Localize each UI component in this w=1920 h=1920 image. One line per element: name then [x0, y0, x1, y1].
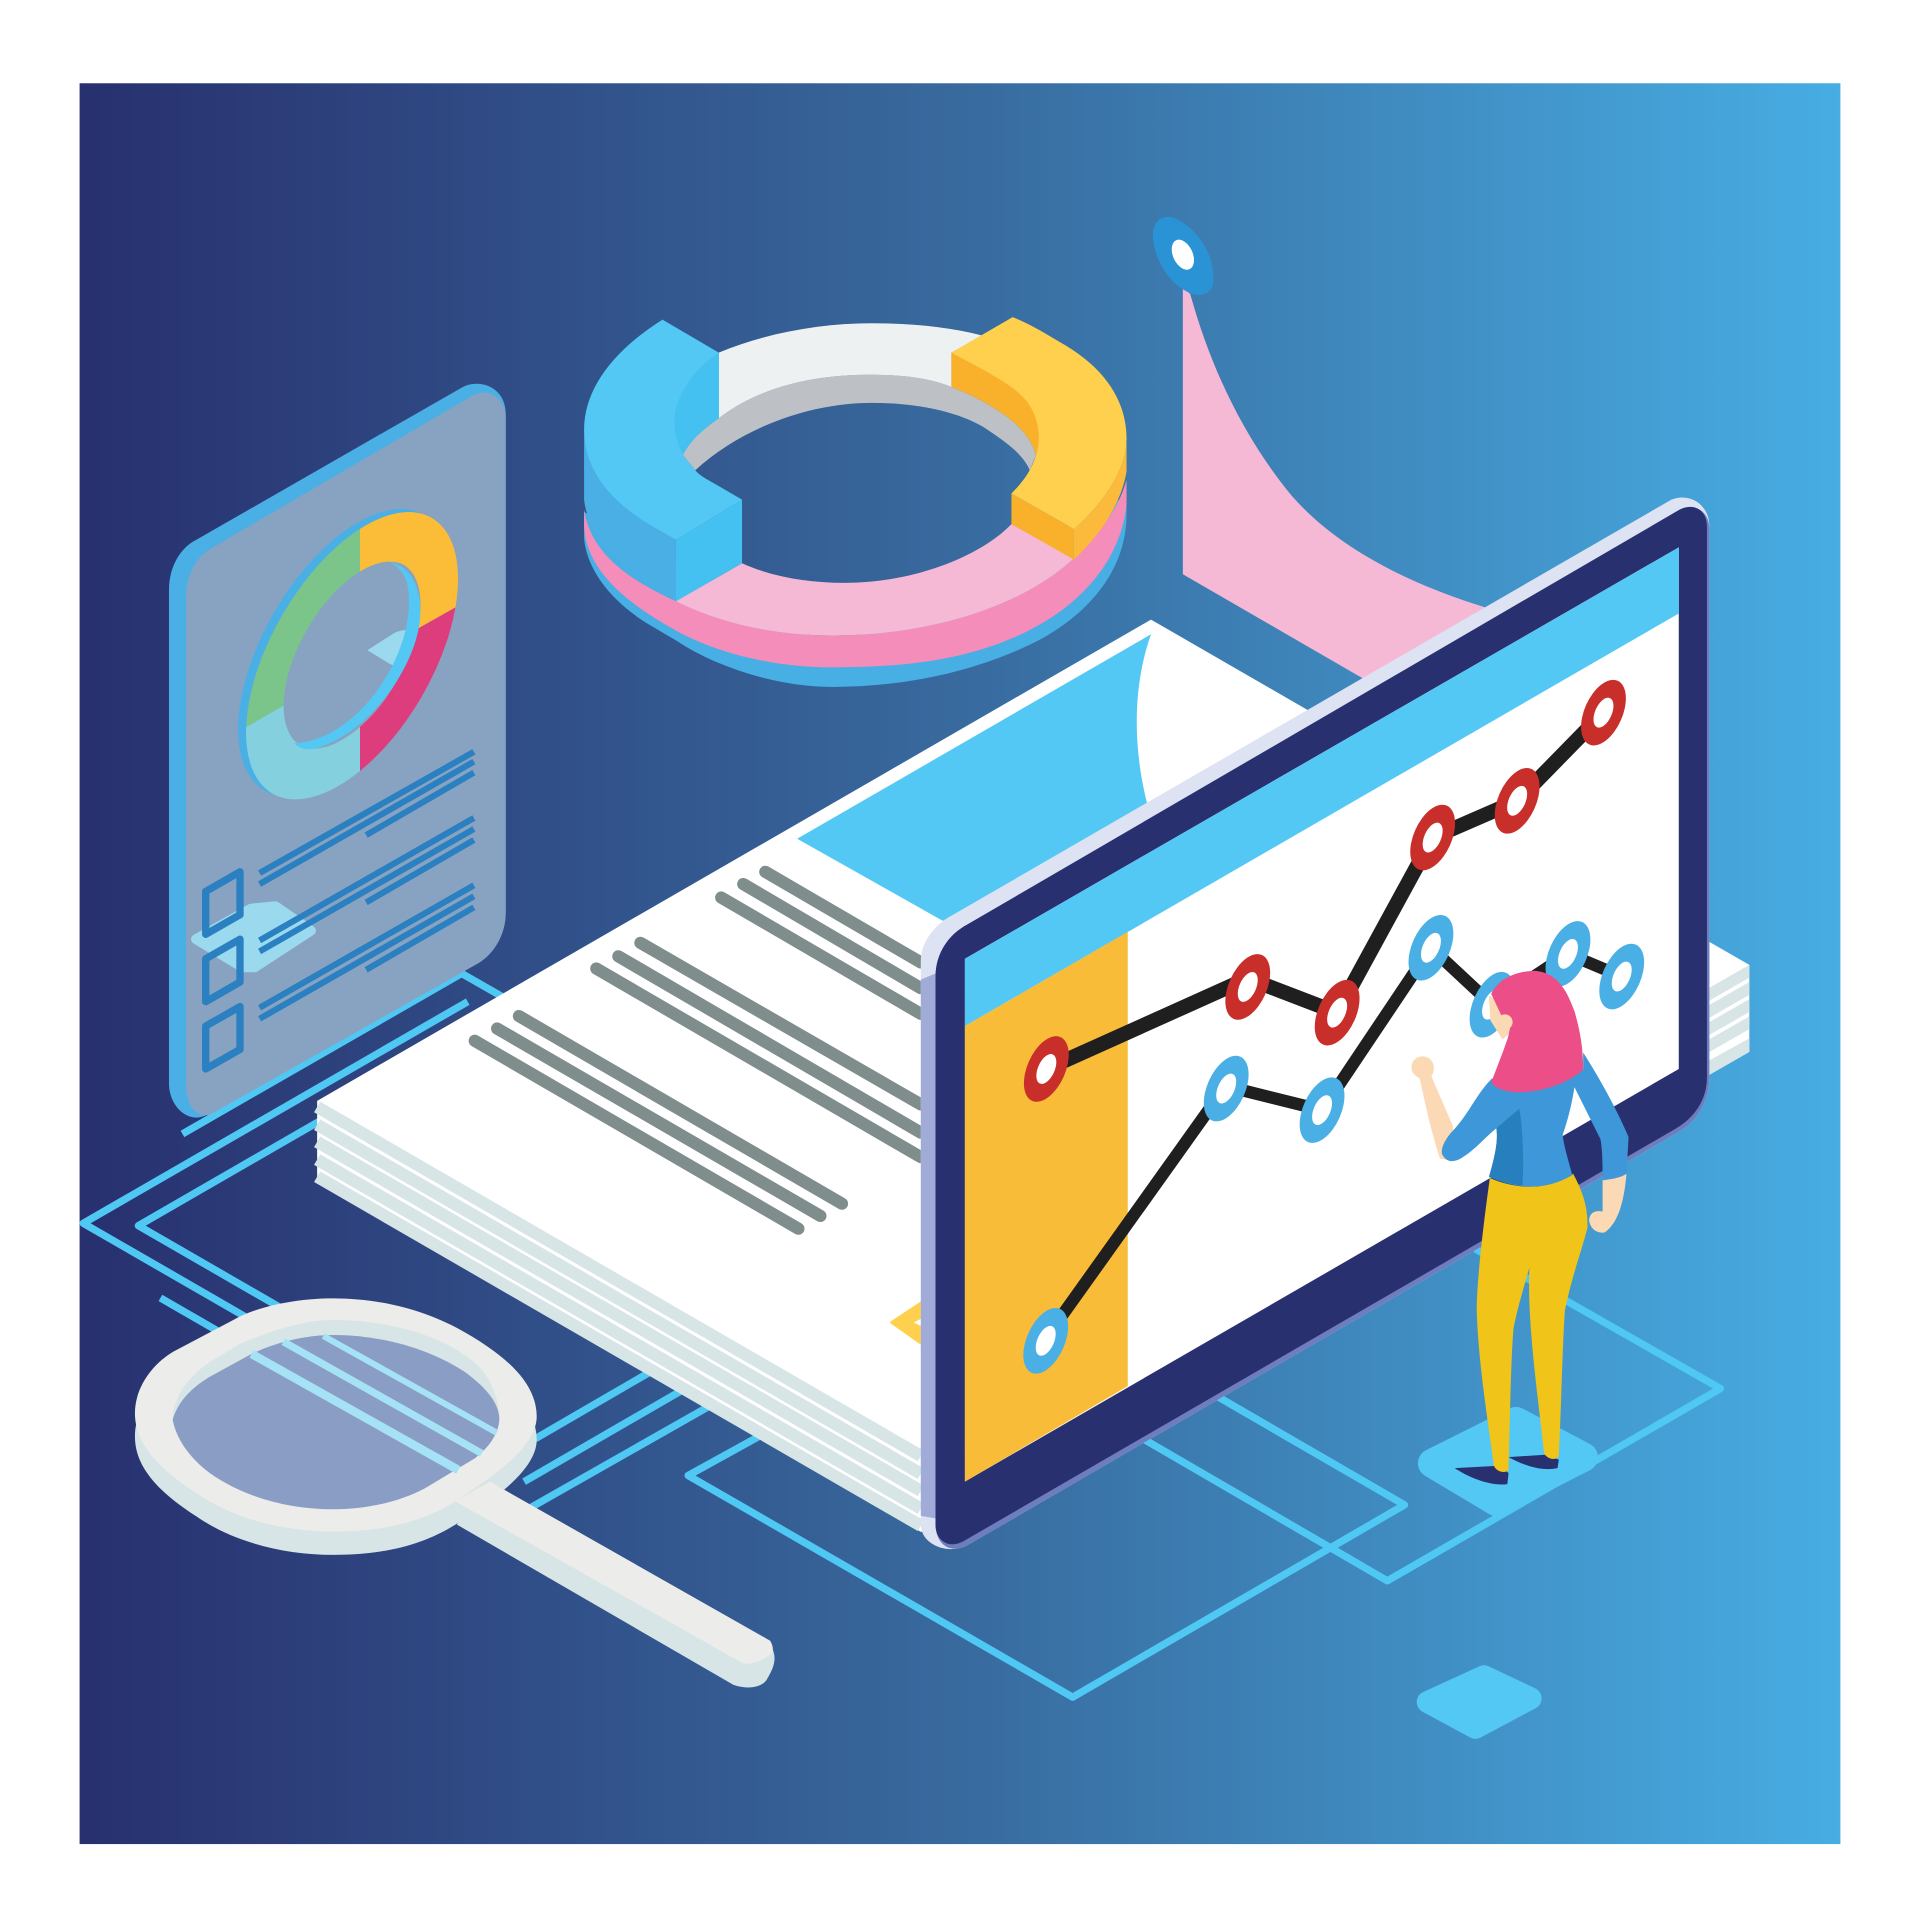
paper stack: [317, 620, 1696, 1532]
wireframe floor lines: [83, 973, 1720, 1697]
donut light segment: [719, 323, 982, 418]
floor pad bottom: [1428, 1676, 1531, 1728]
donut blue base: [584, 496, 1127, 687]
line chart: [1014, 673, 1653, 1380]
paper stack right edge: [1690, 931, 1749, 1086]
red series line: [1046, 713, 1603, 1069]
lens: [173, 1335, 499, 1509]
torso and arms: [1442, 1052, 1629, 1187]
text lines: [260, 752, 474, 1019]
paper yellow tag: [891, 1303, 921, 1343]
donut blue segment top: [584, 320, 742, 540]
handle: [455, 1482, 775, 1687]
lens refracted lines: [252, 1336, 497, 1470]
right hand: [1589, 1173, 1626, 1233]
trousers: [1477, 1174, 1587, 1472]
checkboxes: [206, 872, 240, 1069]
monitor screen: [965, 547, 1679, 1482]
donut blue segment side: [584, 430, 676, 601]
left forearm and hand: [1411, 1056, 1453, 1161]
donut blue segment front: [676, 500, 742, 601]
screen orange column: [965, 932, 1128, 1482]
monitor outer bezel: [921, 497, 1709, 1549]
donut yellow segment side: [1074, 438, 1127, 560]
shadow diamond behind card: [196, 906, 311, 967]
figure: woman pointing at chart: [1411, 971, 1629, 1485]
panel: report card with ring chart: [169, 384, 506, 1118]
face: [1489, 996, 1512, 1040]
red series markers: [1015, 673, 1635, 1109]
shoes: [1455, 1455, 1559, 1485]
screen blue band: [965, 547, 1679, 1026]
blue series line: [1046, 948, 1622, 1338]
ring body shadow: [135, 1322, 537, 1555]
ear: [1497, 1014, 1513, 1030]
donut pink side: [584, 480, 1127, 667]
shirt shadow: [1489, 1109, 1523, 1186]
monitor frame: [936, 507, 1707, 1544]
pink area chart tail: [1183, 288, 1485, 678]
3D donut chart: [584, 317, 1127, 687]
donut yellow inner wall: [951, 353, 1039, 456]
paper page edges: [317, 1107, 921, 1526]
map pin marker: [1153, 217, 1213, 295]
donut blue inner wedge: [674, 353, 719, 455]
paper blue heading block: [797, 634, 1151, 921]
magnifying glass: [135, 1298, 775, 1687]
blue series markers: [1014, 908, 1653, 1380]
donut pink top segment: [676, 524, 1074, 636]
inner wall: [173, 1320, 500, 1469]
donut light segment inner wall: [683, 375, 1036, 470]
donut yellow segment front: [1011, 493, 1074, 560]
ring top face: [135, 1298, 537, 1532]
monitor: [921, 497, 1709, 1549]
donut yellow segment top: [951, 317, 1127, 529]
hair: [1491, 971, 1583, 1092]
floor pad under figure: [1433, 1422, 1583, 1501]
ring chart: [238, 509, 458, 800]
paper grey text lines: [475, 872, 921, 1229]
